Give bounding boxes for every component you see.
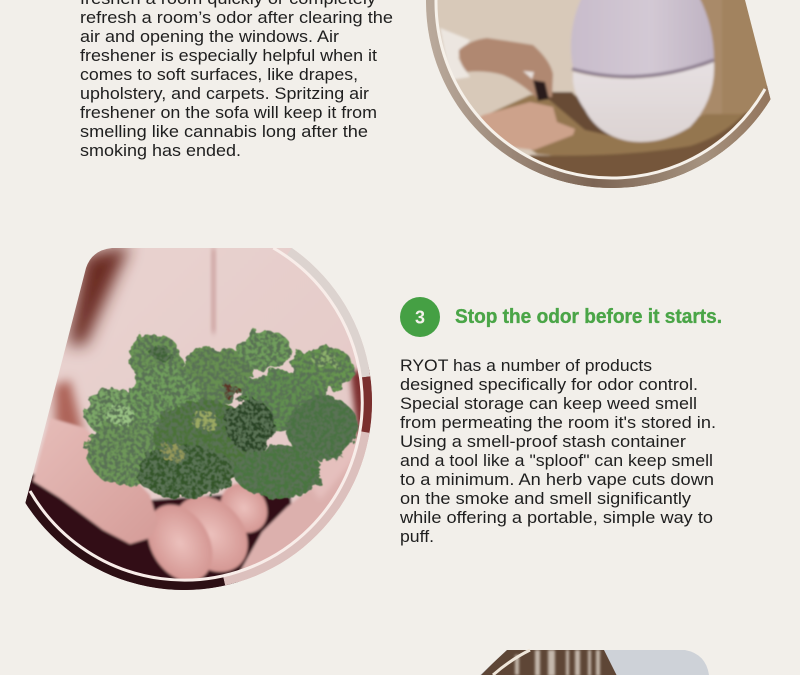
text block: step 3 body: to a minimum. An herb vape cuts down: [400, 470, 714, 489]
text block: step 3 body: while offering a portable, simple way to: [399, 508, 713, 527]
second finger: [146, 502, 212, 579]
lower hand: [473, 102, 575, 150]
third finger: [178, 495, 250, 574]
fourth finger: [219, 482, 270, 536]
shelf front: [526, 112, 762, 188]
dark shadow top left: [68, 245, 130, 345]
text block: step 3 body: on the smoke and smell significantly: [400, 489, 692, 508]
text block: air freshener tip: air and opening the windows. Air: [80, 27, 339, 46]
text block: air freshener tip: refresh a room’s odor after clearing the: [80, 8, 393, 27]
upper hand: [459, 38, 553, 98]
step number badge: 3: [415, 308, 425, 328]
sleeve: [440, 28, 470, 80]
text block: step 3 body: puff.: [400, 527, 434, 546]
index finger: [33, 418, 158, 544]
ring: [436, 0, 765, 178]
outer band: pink lower right: [224, 432, 364, 581]
ring: [493, 650, 530, 675]
shelf top: [492, 93, 742, 158]
photo: hand holding cannabis buds: [15, 245, 385, 600]
outer band: [431, 0, 793, 183]
photo: next step, cropped at the bottom edge: [478, 648, 713, 675]
text block: air freshener tip: smelling like cannabis long after the: [80, 122, 368, 141]
ring: [30, 248, 362, 580]
text block: air freshener tip: smoking has ended.: [80, 141, 241, 160]
text block: step 3 body: Using a smell-proof stash container: [400, 432, 686, 451]
diffuser top: [571, 0, 714, 76]
text block: air freshener tip: freshener is especially helpful when it: [80, 46, 377, 65]
cannabis buds: [84, 330, 358, 498]
text block: air freshener tip: freshener on the sofa will keep it from: [80, 103, 377, 122]
heading: step 3: Stop the odor before it starts.: [455, 306, 722, 328]
right palm: [236, 439, 368, 582]
step number badge: [400, 297, 440, 337]
text block: air freshener tip: comes to soft surfaces, like drapes,: [80, 65, 358, 84]
outer band: pale upper right: [289, 252, 365, 377]
wall at right: [699, 0, 724, 118]
shelf shadow: [548, 90, 610, 136]
diffuser base: [573, 62, 714, 142]
text block: air freshener tip: upholstery, and carpets. Spritzing air: [80, 84, 369, 103]
text block: step 3 body: designed specifically for odor control.: [400, 375, 698, 394]
palm crease: [211, 248, 216, 333]
text block: step 3 body: and a tool like a "sploof" can keep smell: [400, 451, 713, 470]
outer band: dark red right: [364, 377, 367, 432]
text block: step 3 body: RYOT has a number of products: [400, 356, 652, 375]
outer band: dark bottom: [27, 496, 224, 585]
text block: step 3 body: Special storage can keep weed smell: [400, 394, 697, 413]
bottle: [533, 80, 549, 101]
text block: step 3 body: from permeating the room it's stored in.: [400, 413, 716, 432]
photo: diffuser on a shelf: [426, 0, 770, 188]
dark area below fingers: [26, 472, 293, 590]
text block: step 3 body: [399, 356, 716, 546]
text block: air freshener tip: [80, 0, 393, 160]
